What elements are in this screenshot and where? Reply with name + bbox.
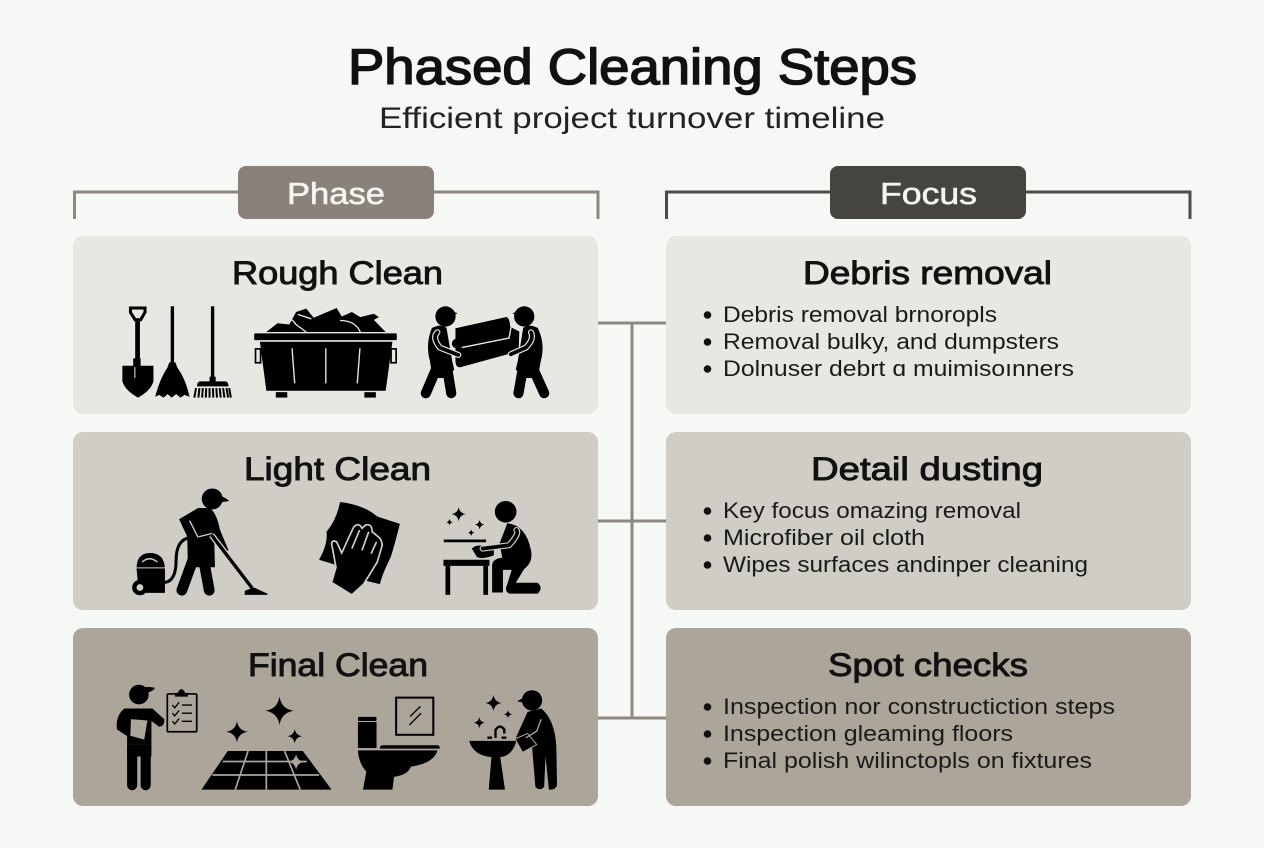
phase column header	[74, 166, 598, 219]
heading: light clean: Light Clean	[244, 451, 431, 487]
bullet list: spot checks: Inspection nor constructiction steps	[723, 694, 1115, 719]
icon: toilet and mirror	[358, 698, 440, 790]
heading: spot checks: Spot checks	[828, 647, 1028, 683]
bullet list: spot checks: Final polish wilinctopls on fixtures	[723, 748, 1092, 773]
icon: broom	[155, 306, 190, 398]
heading: rough clean: Rough Clean	[232, 255, 443, 291]
focus column header: Focus	[880, 176, 977, 211]
panel: rough clean	[73, 236, 598, 414]
bullet list: debris removal: Debris removal brnoropls	[723, 302, 997, 327]
icon: hand with cloth	[319, 502, 400, 595]
icons: final clean inspector, floor, toilet, sink	[117, 685, 557, 790]
bullet list: spot checks	[704, 694, 1115, 773]
phase column header: Phase	[287, 176, 385, 211]
panel: detail dusting	[666, 432, 1191, 610]
icon: dumpster	[254, 308, 397, 398]
panel: light clean	[73, 432, 598, 610]
icon: person vacuuming	[132, 488, 267, 595]
focus column header	[666, 166, 1190, 219]
bullet list: detail dusting: Wipes surfaces andinper cleaning	[723, 552, 1088, 577]
heading: final clean: Final Clean	[248, 647, 428, 683]
connector lines between phase and focus	[598, 323, 666, 718]
bullet list: detail dusting	[704, 498, 1088, 577]
bullet list: debris removal	[704, 302, 1074, 381]
icon: shovel	[122, 308, 153, 398]
panel: spot checks	[666, 628, 1191, 806]
bullet list: debris removal: Dolnuser debrt ɑ muimisoınners	[723, 356, 1074, 381]
bullet list: debris removal: Removal bulky, and dumpsters	[723, 329, 1059, 354]
icon: push broom	[194, 306, 231, 398]
icons: light clean vacuum, cloth, dusting	[132, 488, 541, 595]
icons: rough clean tools, dumpster, movers	[122, 306, 544, 398]
heading: detail dusting: Detail dusting	[811, 451, 1043, 487]
icon: person dusting table	[443, 501, 541, 595]
heading: debris removal: Debris removal	[803, 255, 1052, 291]
panel: debris removal	[666, 236, 1191, 414]
icon: person cleaning sink	[469, 690, 557, 790]
icon: sofa carried by two movers	[426, 306, 544, 393]
icon: inspector with clipboard	[117, 685, 197, 785]
bullet list: detail dusting: Key focus omazing removal	[723, 498, 1021, 523]
bullet list: spot checks: Inspection gleaming floors	[723, 721, 1013, 746]
title: Phased Cleaning Steps	[348, 39, 917, 95]
panel: final clean	[73, 628, 598, 806]
subtitle: Efficient project turnover timeline	[379, 102, 885, 135]
bullet list: detail dusting: Microfiber oil cloth	[723, 525, 925, 550]
icon: gleaming tile floor	[201, 697, 332, 790]
